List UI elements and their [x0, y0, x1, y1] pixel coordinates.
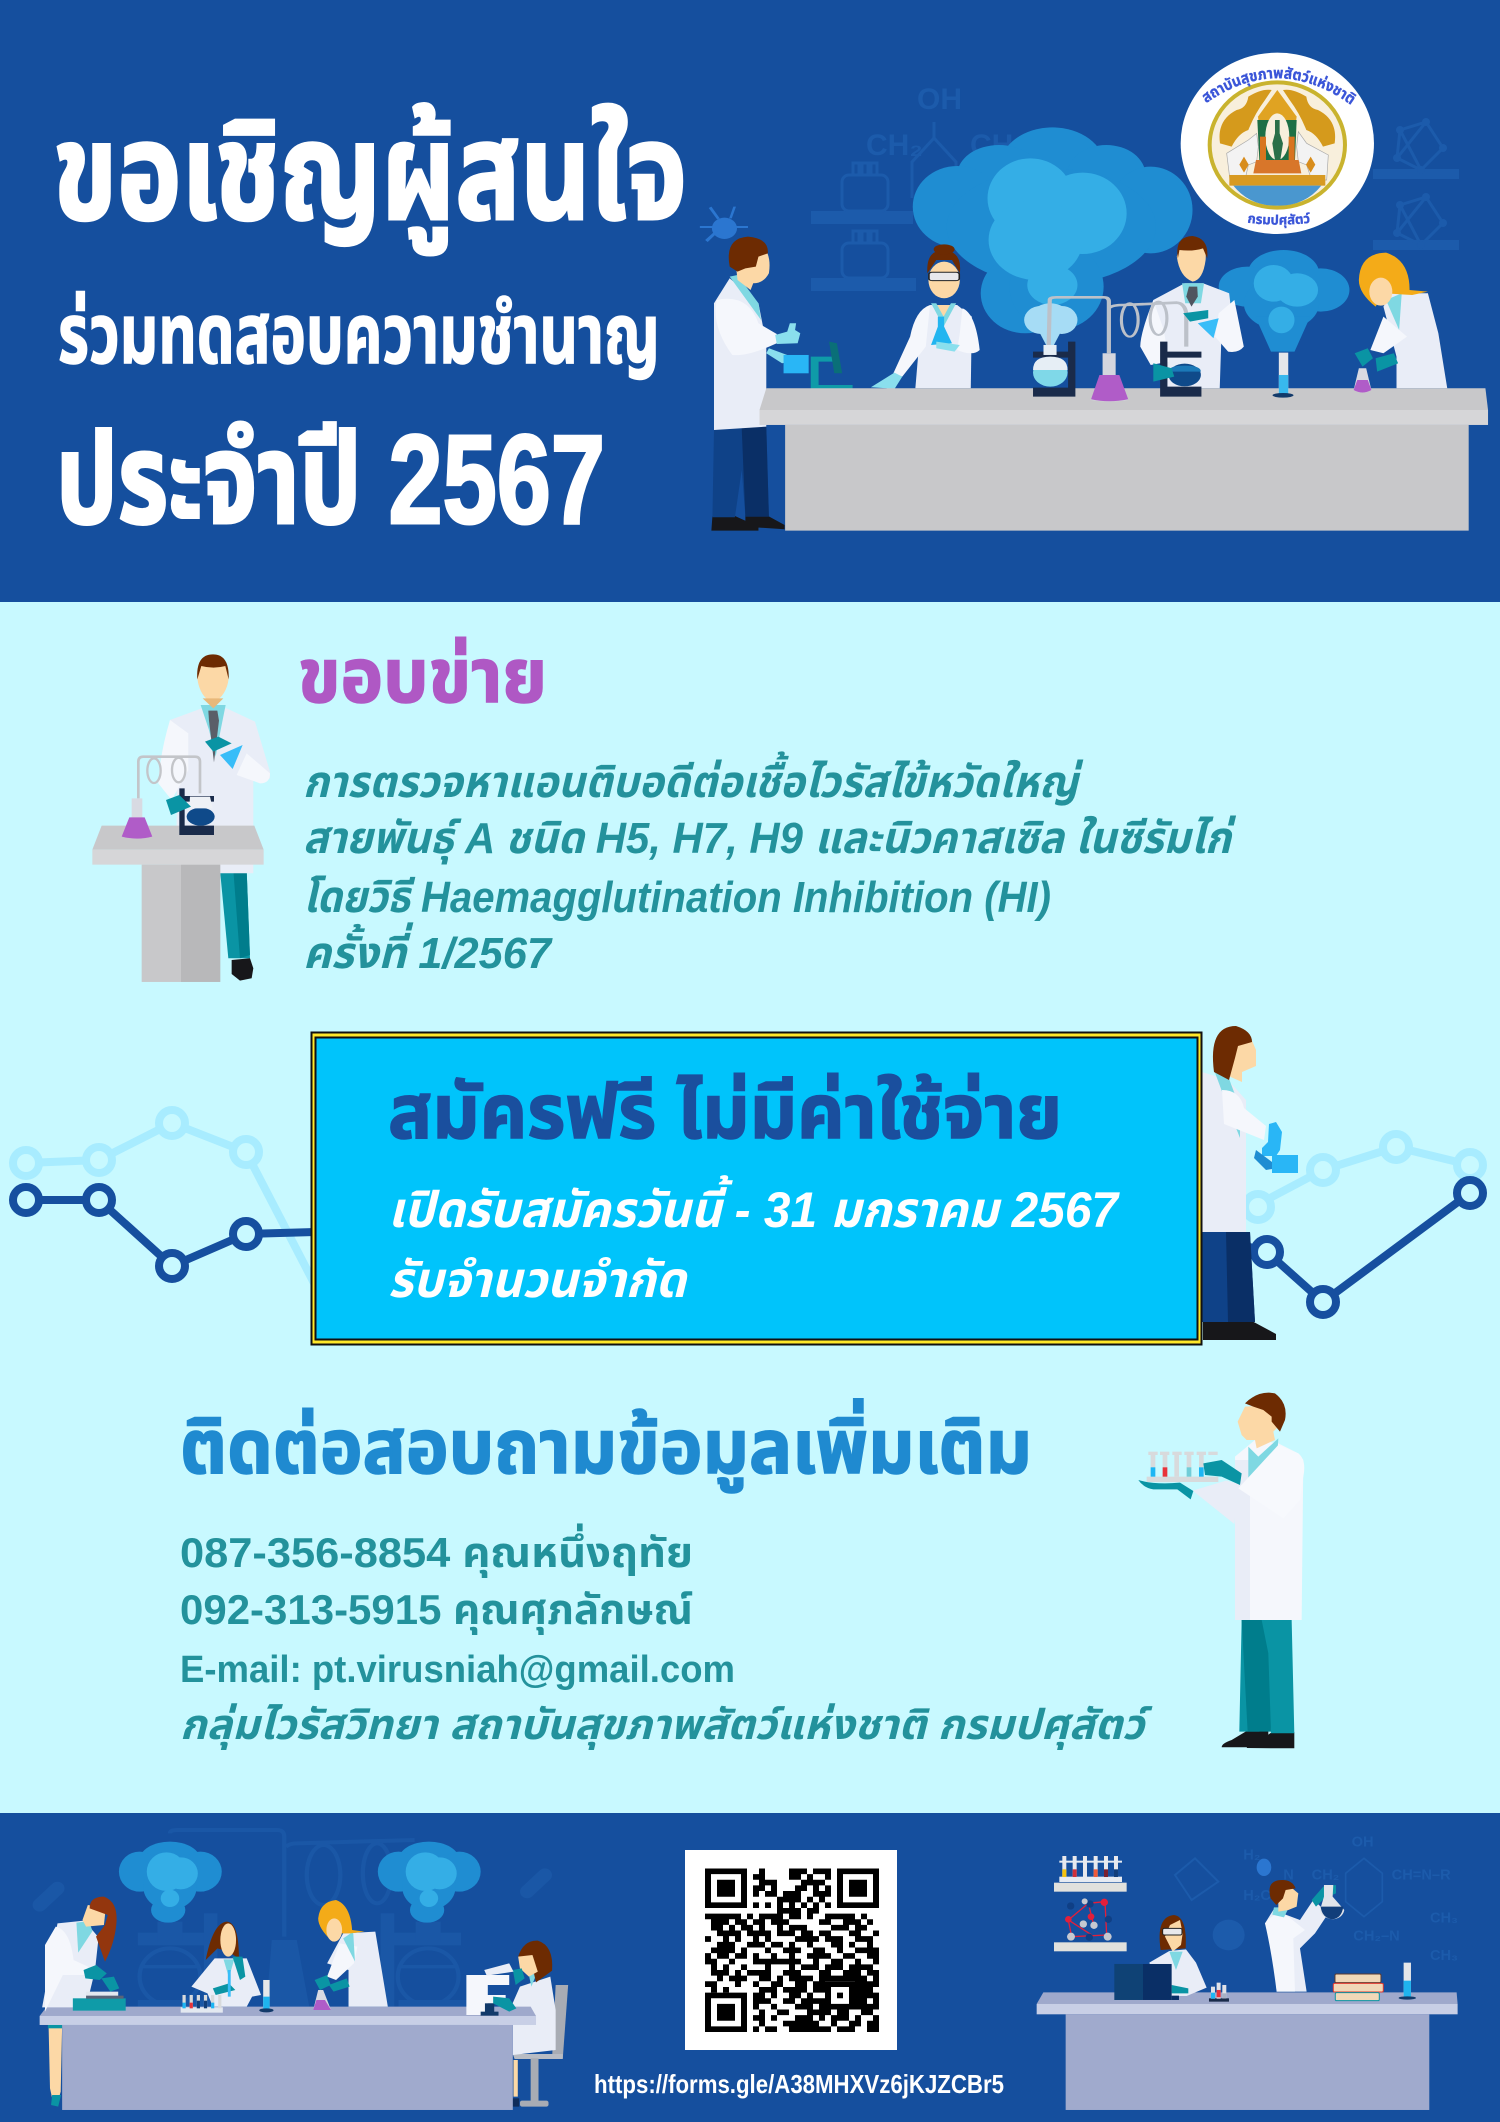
faint chemistry background: N: [1283, 1867, 1294, 1883]
title: ร่วมทดสอบความชำนาญ: [58, 287, 660, 381]
faint chemistry background: CH₃: [1430, 1911, 1458, 1927]
table: [1037, 1992, 1458, 2110]
title: [53, 96, 687, 550]
icon: scientist beside box: [1200, 1026, 1298, 1340]
person: woman at laptop: [1114, 1915, 1229, 2002]
right lab scene illustration: [1037, 1835, 1458, 2110]
faint chemistry background: H₂C: [1243, 1888, 1271, 1904]
contact details: [180, 1523, 1153, 1750]
smoke clouds: [119, 1842, 481, 1923]
microscope: [808, 342, 857, 406]
books: [1333, 1974, 1383, 2001]
scope description: โดยวิธี Haemagglutination Inhibition (HI): [303, 873, 1051, 922]
faint chemistry background: OH: [917, 83, 962, 116]
big smoke cloud: [913, 127, 1193, 333]
table: [759, 388, 1488, 531]
person at microscope with chair: [499, 1941, 568, 2107]
title: ประจำปี 2567: [56, 409, 605, 550]
cloud highlights: [147, 1852, 457, 1907]
person: scientist with plate (standing): [711, 237, 809, 531]
scope description: การตรวจหาแอนติบอดีต่อเชื้อไวรัสไข้หวัดใหญ่: [303, 751, 1084, 807]
person: man with flask: [1265, 1880, 1344, 1992]
apparatus: stands, flasks and tubes: [1033, 297, 1371, 402]
flask steam: [1024, 303, 1077, 345]
left lab scene illustration: [30, 1830, 568, 2110]
chart: left line decoration: [13, 1110, 315, 1285]
shelf: test tubes: [1054, 1856, 1127, 1892]
test tube: [1399, 1963, 1416, 2000]
person: red-haired woman: [42, 1897, 126, 2012]
test tube: [259, 1980, 274, 2012]
small smoke cloud: [1219, 250, 1349, 352]
panel: footer: [0, 1813, 1500, 2122]
contact details: E-mail: pt.virusniah@gmail.com: [180, 1649, 735, 1691]
faint chemistry background: CH₂: [866, 129, 923, 162]
cloud highlight: [988, 158, 1127, 305]
faint chemistry background: [1175, 1835, 1458, 1964]
faint chemistry background: H₂: [1243, 1847, 1260, 1863]
person: man with tie: [1140, 236, 1244, 388]
icon: light bulb: [700, 207, 748, 242]
title: ขอเชิญผู้สนใจ: [53, 96, 687, 255]
callout heading: สมัครฟรี ไม่มีค่าใช้จ่าย: [388, 1070, 1062, 1155]
logo seal: สถาบันสุขภาพสัตว์แห่งชาติ: [1202, 66, 1357, 105]
callout details: [388, 1175, 1120, 1308]
podium table: [92, 826, 264, 982]
scope description: [303, 751, 1236, 978]
lab scene illustration: [700, 127, 1488, 531]
person: blonde woman: [313, 1900, 388, 2010]
faint chemistry background: CH₂–N: [1353, 1929, 1400, 1945]
faint chemistry background: [811, 83, 1459, 291]
contact details: 092-313-5915 คุณศุภลักษณ์: [180, 1586, 693, 1635]
logo seal: กรมปศุสัตว์: [1248, 212, 1310, 228]
table: [40, 2007, 536, 2110]
faint chemistry background: CH=N–R: [1392, 1867, 1451, 1883]
scope description: ครั้งที่ 1/2567: [303, 922, 553, 978]
scope description: สายพันธุ์ A ชนิด H5, H7, H9 และนิวคาสเซิล ในซีรัมไก่: [303, 814, 1236, 865]
small cloud highlight: [1254, 265, 1318, 333]
chart: right line decoration: [1225, 1134, 1483, 1315]
person: brown-haired woman: [181, 1922, 261, 2013]
person: blonde woman: [1355, 253, 1447, 388]
contact details: กลุ่มไวรัสวิทยา สถาบันสุขภาพสัตว์แห่งชาติ กรมปศุสัตว์: [180, 1701, 1153, 1750]
faint chemistry background: CH₃: [1430, 1948, 1458, 1964]
url: https://forms.gle/A38MHXVz6jKJZCBr5: [594, 2069, 1004, 2099]
contact details: 087-356-8854 คุณหนึ่งฤทัย: [180, 1523, 693, 1578]
faint chemistry background: CH₂: [1312, 1867, 1339, 1883]
callout details: เปิดรับสมัครวันนี้ - 31 มกราคม 2567: [388, 1175, 1120, 1238]
icon: scientist with test tube tray: [1138, 1393, 1304, 1748]
shelf: molecule model: [1054, 1898, 1127, 1951]
heading: contact: ติดต่อสอบถามข้อมูลเพิ่มเติม: [180, 1398, 1032, 1493]
QR code: [685, 1850, 897, 2050]
callout box: free registration: [312, 1032, 1202, 1344]
logo seal: [1180, 52, 1374, 234]
person: woman with glasses: [871, 244, 980, 393]
faint chemistry background: CH: [970, 129, 1013, 162]
microscope on table: [466, 1963, 516, 2016]
faint chemistry background: OH: [1352, 1835, 1374, 1851]
person leg below table: [48, 2023, 62, 2107]
callout details: รับจำนวนจำกัด: [388, 1252, 688, 1308]
faint apparatus background: [30, 1830, 555, 2007]
heading: scope: ขอบข่าย: [298, 634, 547, 719]
icon: scientist at podium: [92, 654, 270, 982]
